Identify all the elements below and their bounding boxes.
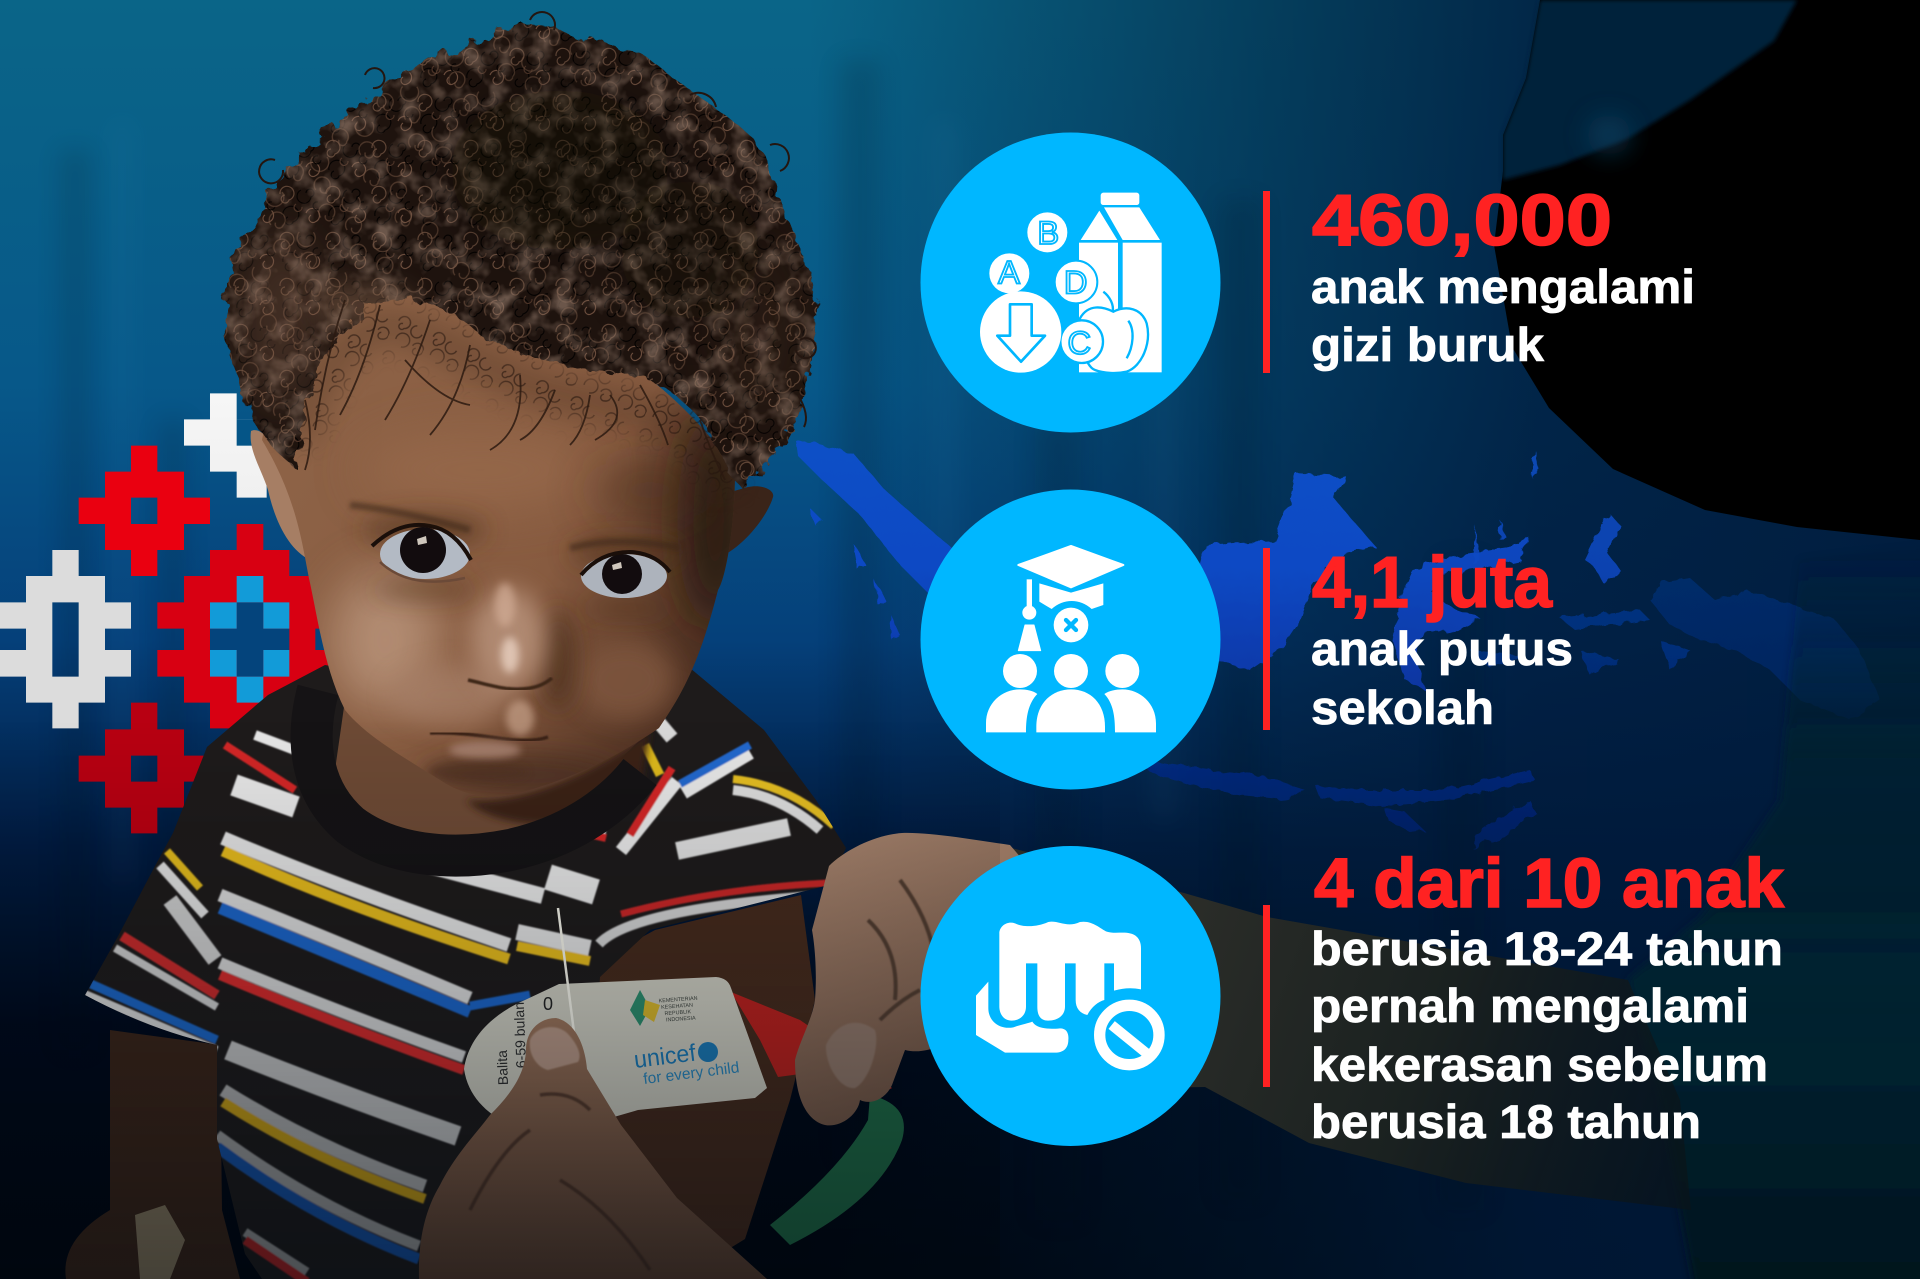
icon: nutrition <box>920 132 1220 432</box>
face: lower lip <box>449 741 521 759</box>
child: eye sockets <box>363 514 681 615</box>
face: nose highlight <box>501 637 519 673</box>
ornament: blue squares <box>210 576 289 703</box>
map of Indonesia <box>795 440 1880 848</box>
face: temple shadow <box>590 460 710 520</box>
band: zero mark: 0 <box>543 994 553 1014</box>
ornament: red large inner dark <box>210 602 342 677</box>
stat text: pernah mengalami <box>1311 979 1749 1032</box>
divider bar <box>1263 191 1270 373</box>
stat text: anak mengalami <box>1311 260 1695 313</box>
child: right eye <box>581 552 670 598</box>
face: right shadow <box>677 410 753 630</box>
band: ministry text <box>658 996 699 1024</box>
hand: thumbnail <box>530 1027 580 1070</box>
traditional pattern ornaments <box>0 393 342 833</box>
person: forearm <box>1000 845 1691 1210</box>
stat text: anak putus <box>1311 622 1573 675</box>
stat number: 4,1 juta <box>1312 543 1553 623</box>
stat 3: violence <box>920 844 1784 1148</box>
shirt: stripes <box>85 712 834 1279</box>
child: neck shadow <box>466 730 650 825</box>
child: collar <box>312 690 640 856</box>
hair: irregular texture <box>180 0 850 510</box>
hand: thumb nail <box>826 1023 876 1088</box>
icon: nutrition: C <box>1068 324 1091 361</box>
stat text <box>1311 922 1783 1148</box>
face: nostrils <box>468 678 552 689</box>
child: curly hair <box>220 11 820 489</box>
band: card <box>464 908 767 1136</box>
band: ministry text: KEMENTERIAN <box>658 996 698 1004</box>
hair: stray curls <box>259 12 816 427</box>
face: forehead highlight <box>407 444 568 498</box>
icon: nutrition: B <box>1037 214 1059 251</box>
face: philtrum highlight <box>506 700 534 736</box>
masked person: face and mask silhouette <box>1494 0 1920 540</box>
face: bridge highlight <box>495 583 515 627</box>
band: unicef emblem <box>698 1042 718 1062</box>
child <box>65 0 850 1279</box>
face: right cheek <box>575 640 675 720</box>
icon: dropout <box>920 490 1220 790</box>
map: Sulawesi <box>1392 537 1529 690</box>
hair: wisps over forehead <box>305 300 725 480</box>
map: Timor and Sumba <box>1384 800 1535 848</box>
child: fringe curls dissolving into forehead <box>300 298 754 490</box>
hand: creases <box>868 880 935 1020</box>
ornament: white top <box>184 393 267 498</box>
child: right ear <box>720 486 773 556</box>
map: Java and Nusa Tenggara <box>1125 745 1535 806</box>
stat 2: school dropout <box>920 490 1573 790</box>
band: tagline: for every child <box>642 1059 740 1088</box>
person: torso <box>1628 540 1920 1279</box>
face: mouth <box>430 733 548 740</box>
face: lower shadow <box>420 753 620 797</box>
band: ministry text: REPUBLIK <box>664 1009 692 1017</box>
person: nose highlight <box>1587 115 1631 155</box>
ornament: red bottom <box>79 703 210 833</box>
stat 1: malnutrition <box>920 132 1695 432</box>
icon: nutrition: D <box>1064 264 1087 301</box>
map: western islands <box>809 507 900 640</box>
face: nose shadow right <box>542 610 574 710</box>
band: red strap <box>731 992 892 1095</box>
pinching hand <box>419 1018 767 1279</box>
stat number: 4 dari 10 anak <box>1314 844 1784 922</box>
ornament: dark hole in white top <box>237 419 267 446</box>
map: Maluku islands <box>1474 450 1620 585</box>
hand: creases <box>470 1094 650 1270</box>
stat text: kekerasan sebelum <box>1311 1038 1768 1091</box>
band: ministry logo <box>630 990 660 1026</box>
stat text: berusia 18 tahun <box>1311 1095 1701 1148</box>
face: nose <box>470 588 546 692</box>
divider bar <box>1263 905 1270 1087</box>
band: green tail <box>770 1095 904 1245</box>
band: ministry text: INDONESIA <box>666 1015 696 1024</box>
icon: fist with prohibition sign <box>920 846 1220 1146</box>
face: left cheek <box>330 570 440 710</box>
map: small eastern islands <box>1470 610 1690 675</box>
band: divider slit <box>558 908 575 1040</box>
child: paper in hand <box>135 1205 185 1279</box>
stat number: 460,000 <box>1312 181 1612 261</box>
band: rotated label: Balita <box>494 1050 511 1085</box>
map: Sumatra <box>795 440 1040 660</box>
stat text: sekolah <box>1311 681 1494 734</box>
hair: shading <box>242 90 800 420</box>
icon: nutrition: A <box>998 253 1020 290</box>
ornament: red top <box>79 446 210 576</box>
child: brows <box>350 505 680 548</box>
person: upper face in shadow <box>1503 0 1797 180</box>
ornament: red large <box>157 524 342 756</box>
child: face <box>262 295 735 794</box>
child: neck <box>335 690 640 840</box>
divider bar <box>1263 548 1270 730</box>
child: left eye <box>372 525 471 582</box>
map: Kalimantan <box>1190 473 1376 670</box>
face: lower center skin <box>390 665 510 725</box>
bottom darkening <box>0 720 1000 1279</box>
face: chin grime <box>429 760 494 779</box>
band: ministry text: KESEHATAN <box>661 1003 693 1011</box>
stat text <box>1311 622 1573 734</box>
map: Papua <box>1650 578 1880 720</box>
child: right arm <box>560 895 815 1279</box>
child: left arm and hand <box>65 1030 240 1279</box>
band: rotated label two: 6-59 bulan <box>511 1002 529 1068</box>
band: unicef wordmark: unicef <box>632 1040 698 1074</box>
stat text: berusia 18-24 tahun <box>1311 922 1783 975</box>
MUAC measuring band <box>464 908 904 1245</box>
stat text <box>1311 260 1695 371</box>
ornament: white large <box>0 550 131 728</box>
child: striped shirt <box>85 665 846 1279</box>
child: left ear <box>251 430 310 560</box>
stat text: gizi buruk <box>1311 318 1545 371</box>
face: scar line <box>380 745 470 800</box>
holding hand on arm <box>795 833 1040 1125</box>
